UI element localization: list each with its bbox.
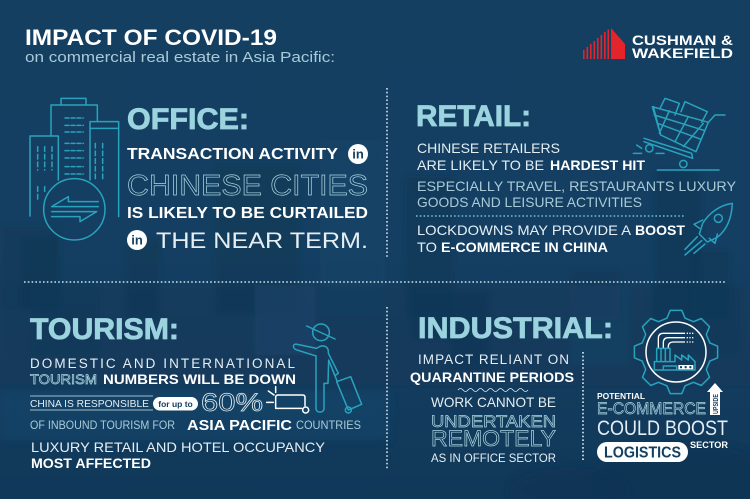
- text: retail statements: [416, 140, 737, 255]
- icon: office towers with exchange arrows: [30, 98, 119, 240]
- icon: upside arrow: UPSIDE: [713, 394, 720, 414]
- text: industrial statements: [410, 352, 574, 465]
- pill: for up to: [153, 397, 198, 410]
- title: [25, 25, 335, 66]
- text: office statement: in: [352, 146, 364, 162]
- text: retail statements: ESPECIALLY TRAVEL, RESTAURANTS LUXURY: [417, 178, 737, 194]
- panel: tourism: [30, 313, 362, 471]
- logo: Cushman & Wakefield: WAKEFIELD: [632, 46, 733, 61]
- logo: Cushman & Wakefield: CUSHMAN &: [632, 33, 733, 48]
- text: retail statements: E-COMMERCE IN CHINA: [441, 239, 608, 255]
- text: industrial statements: REMOTELY: [431, 426, 556, 451]
- icon: tipping shopping cart: [633, 98, 725, 170]
- text: industrial statements: IMPACT RELIANT ON: [418, 352, 569, 367]
- heading: office: OFFICE:: [127, 103, 249, 136]
- icon: traveller with suitcase: [293, 324, 362, 413]
- text: industrial statements: QUARANTINE PERIODS: [410, 369, 574, 385]
- text: retail statements: BOOST: [635, 222, 685, 238]
- heading: retail: RETAIL:: [416, 100, 531, 133]
- text: industrial statements: UNDERTAKEN: [431, 412, 556, 431]
- text: retail statements: GOODS AND LEISURE ACTIVITIES: [417, 194, 642, 210]
- text: tourism statements: TOURISM: [30, 372, 97, 387]
- text: tourism statements: COUNTRIES: [296, 420, 361, 432]
- text: tourism statements: MOST AFFECTED: [31, 455, 151, 471]
- logo: Cushman & Wakefield: [583, 28, 733, 61]
- text: retail statements: HARDEST HIT: [550, 157, 645, 173]
- text: office statement: TRANSACTION ACTIVITY: [127, 146, 339, 163]
- text: retail statements: CHINESE RETAILERS: [417, 140, 560, 156]
- text: tourism statements: DOMESTIC AND INTERNATIONAL: [30, 356, 295, 371]
- text: retail statements: TO: [417, 239, 437, 255]
- text: tourism statements: [30, 356, 361, 471]
- heading: industrial: INDUSTRIAL:: [418, 312, 613, 345]
- text: e-commerce logistics statement: COULD BOOST: [597, 417, 728, 440]
- text: office statement: in: [131, 232, 143, 248]
- heading: tourism: TOURISM:: [30, 313, 179, 346]
- icon: gear with factory: [634, 310, 718, 394]
- text: office statement: CHINESE CITIES: [127, 170, 368, 202]
- text: tourism statements: 60%: [201, 389, 263, 417]
- panel: office: [30, 98, 368, 253]
- title: IMPACT OF COVID-19: [25, 25, 277, 50]
- text: tourism statements: OF INBOUND TOURISM FOR: [30, 420, 175, 432]
- icon: rocket: [685, 203, 732, 255]
- pill: for up to: for up to: [158, 399, 193, 409]
- text: e-commerce logistics statement: SECTOR: [690, 440, 729, 450]
- panel: retail: [416, 98, 737, 255]
- text: tourism statements: NUMBERS WILL BE DOWN: [103, 372, 296, 387]
- panel: industrial: [410, 310, 729, 465]
- text: office statement: IS LIKELY TO BE CURTAILED: [127, 205, 368, 222]
- pill: logistics: LOGISTICS: [604, 444, 681, 462]
- text: office statement: [127, 144, 368, 253]
- text: tourism statements: CHINA IS RESPONSIBLE: [30, 398, 149, 410]
- text: e-commerce logistics statement: POTENTIAL: [597, 391, 645, 401]
- text: e-commerce logistics statement: [597, 383, 729, 462]
- text: office statement: THE NEAR TERM.: [156, 228, 368, 253]
- text: tourism statements: LUXURY RETAIL AND HOTEL OCCUPANCY: [31, 439, 326, 455]
- dividers: [24, 88, 726, 470]
- text: retail statements: LOCKDOWNS MAY PROVIDE A: [417, 222, 632, 238]
- icon: small luggage: [267, 387, 309, 413]
- text: industrial statements: WORK CANNOT BE: [431, 394, 556, 410]
- text: tourism statements: ASIA PACIFIC: [187, 417, 292, 434]
- title: on commercial real estate in Asia Pacific:: [25, 49, 335, 66]
- text: e-commerce logistics statement: E-COMMERCE: [597, 399, 706, 418]
- text: industrial statements: AS IN OFFICE SECTOR: [431, 453, 556, 465]
- text: retail statements: ARE LIKELY TO BE: [417, 157, 544, 173]
